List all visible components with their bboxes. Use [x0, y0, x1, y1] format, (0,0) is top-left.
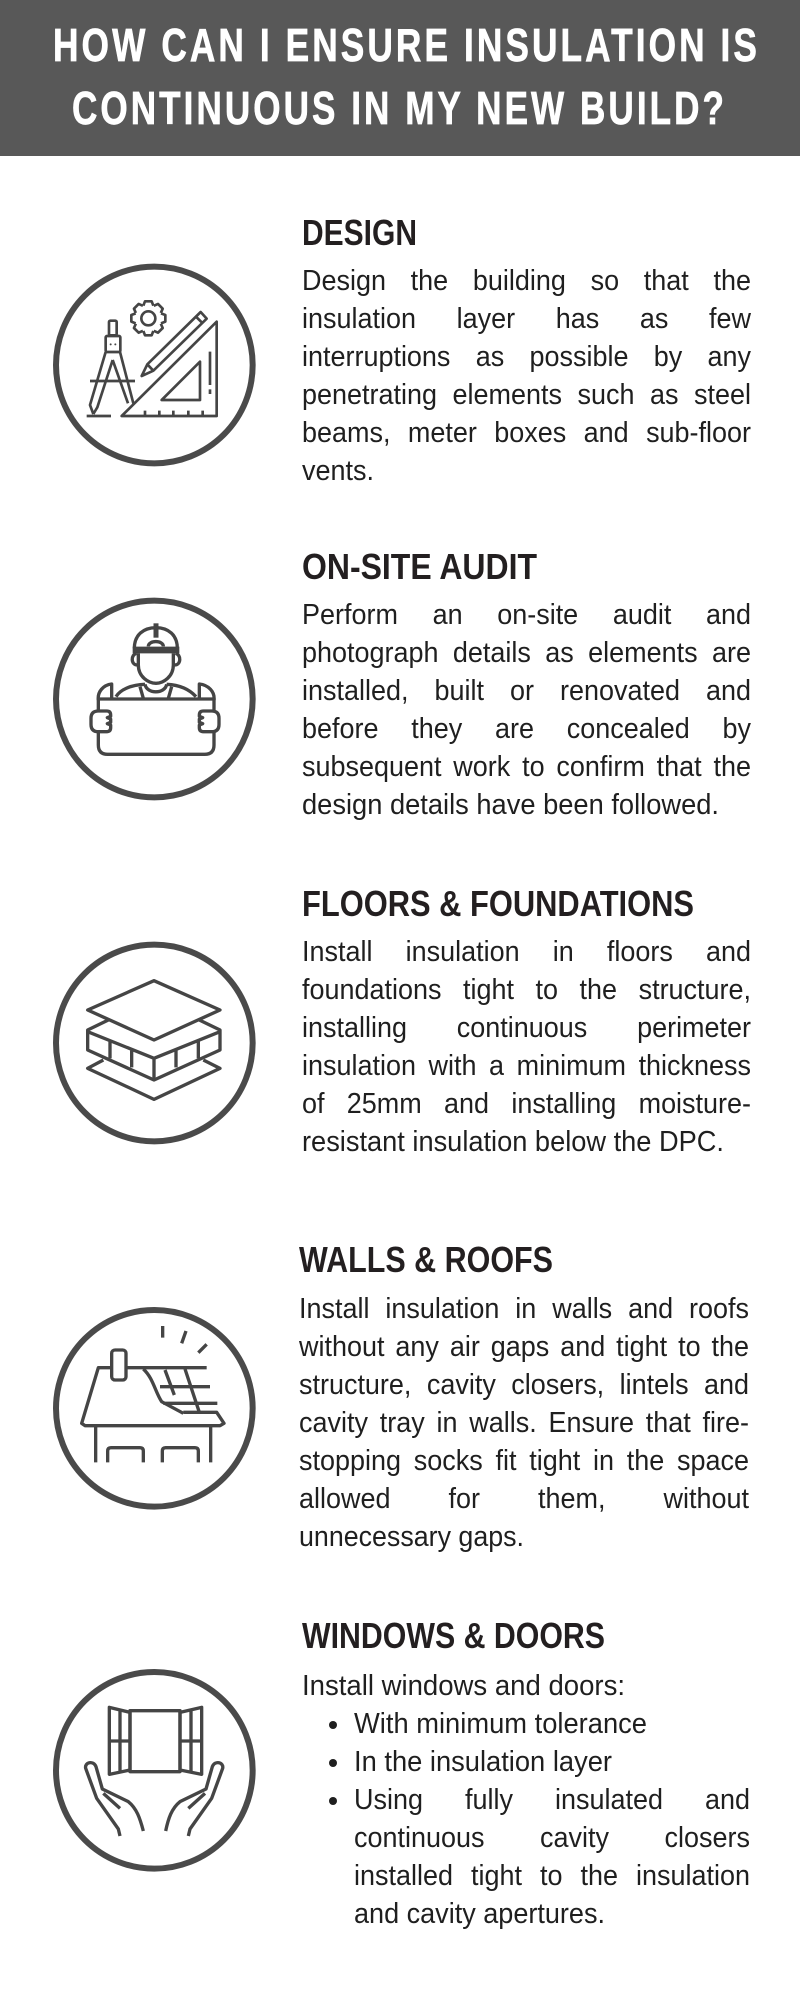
text block: design: interruptions as possible by any — [302, 341, 751, 373]
panel: windows and doors — [53, 1615, 750, 1930]
icon: compass, pencil, set square and gear — [53, 264, 256, 466]
text block: design: beams, meter boxes and sub-floor — [302, 417, 751, 449]
text block: floors and foundations: installing continuous perimeter — [302, 1012, 751, 1044]
text block: on-site audit: before they are concealed by — [302, 713, 751, 745]
bullet list: With minimum tolerance — [354, 1708, 647, 1740]
text block: walls and roofs — [299, 1293, 749, 1553]
bullet list: In the insulation layer — [354, 1746, 612, 1778]
heading: on-site audit: ON-SITE AUDIT — [302, 546, 537, 587]
panel: on-site audit — [53, 546, 751, 821]
text block: design: insulation layer has as few — [302, 303, 751, 335]
bullet list: Using fully insulated and — [354, 1784, 750, 1816]
bullet list — [329, 1708, 750, 1930]
text block: floors and foundations: foundations tight to the structure, — [302, 974, 751, 1006]
heading: design: DESIGN — [302, 212, 417, 253]
heading: floors and foundations: FLOORS & FOUNDATIONS — [302, 883, 694, 924]
text block: intro line: Install windows and doors: — [302, 1670, 625, 1702]
text block: floors and foundations: Install insulation in floors and — [302, 936, 751, 968]
bullet list: installed tight to the insulation — [354, 1860, 750, 1892]
text block: walls and roofs: stopping socks fit tight in the space — [299, 1445, 749, 1477]
text block: on-site audit: installed, built or renovated and — [302, 675, 751, 707]
text block: on-site audit: design details have been followed. — [302, 789, 719, 821]
text block: walls and roofs: structure, cavity closers, lintels and — [299, 1369, 749, 1401]
text block: floors and foundations: resistant insulation below the DPC. — [302, 1126, 724, 1158]
icon: insulation layers — [53, 942, 256, 1144]
bullet list: and cavity apertures. — [354, 1898, 605, 1930]
heading: walls and roofs: WALLS & ROOFS — [299, 1239, 553, 1280]
bullet list: continuous cavity closers — [354, 1822, 750, 1854]
text block: design: Design the building so that the — [302, 265, 751, 297]
icon: hands holding open window — [53, 1669, 256, 1872]
panel: design — [53, 212, 751, 487]
text block: walls and roofs: Install insulation in walls and roofs — [299, 1293, 749, 1325]
header banner — [0, 0, 800, 156]
text block: floors and foundations — [302, 936, 751, 1158]
text block: walls and roofs: cavity tray in walls. Ensure that fire- — [299, 1407, 749, 1439]
text block: walls and roofs: unnecessary gaps. — [299, 1521, 524, 1553]
text block: on-site audit — [302, 599, 751, 821]
text block: floors and foundations: insulation with a minimum thickness — [302, 1050, 751, 1082]
text block: walls and roofs: allowed for them, without — [299, 1483, 749, 1515]
panel: walls and roofs — [53, 1239, 749, 1553]
text block: design: vents. — [302, 455, 374, 487]
text block: on-site audit: photograph details as elements are — [302, 637, 751, 669]
icon: house with exposed roof — [53, 1307, 256, 1510]
heading: windows and doors: WINDOWS & DOORS — [302, 1615, 605, 1656]
text block: design: penetrating elements such as steel — [302, 379, 751, 411]
icon: worker holding plans — [53, 598, 256, 800]
text block: on-site audit: Perform an on-site audit and — [302, 599, 751, 631]
text block: on-site audit: subsequent work to confirm that the — [302, 751, 751, 783]
text block: walls and roofs: without any air gaps and tight to the — [299, 1331, 749, 1363]
title — [53, 19, 760, 134]
text block: floors and foundations: of 25mm and installing moisture- — [302, 1088, 751, 1120]
text block: design — [302, 265, 751, 487]
panel: floors and foundations — [53, 883, 751, 1158]
